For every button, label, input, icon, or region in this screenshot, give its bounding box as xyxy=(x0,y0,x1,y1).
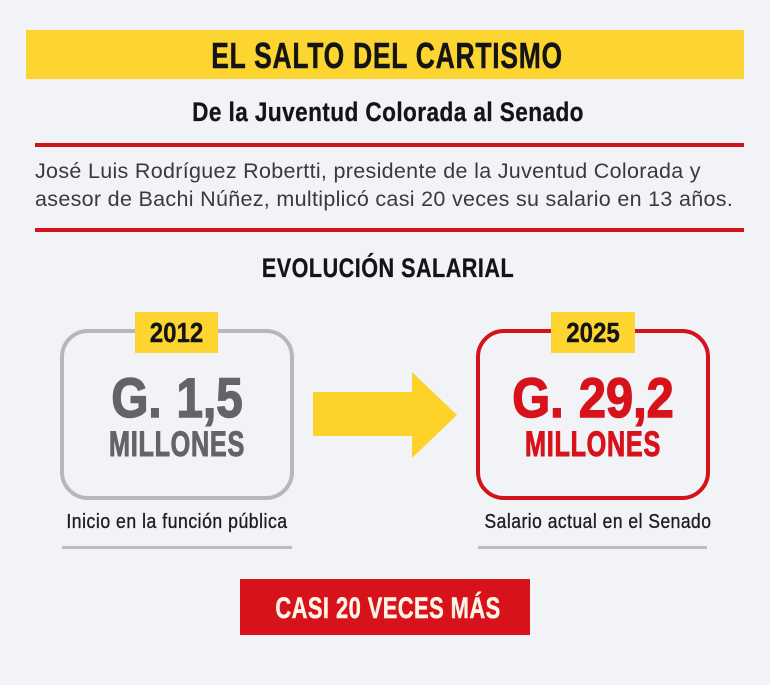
section heading: EVOLUCIÓN SALARIAL xyxy=(262,253,514,283)
top red rule xyxy=(35,143,744,147)
description text xyxy=(35,159,733,210)
year badge 2025 xyxy=(551,312,635,353)
description text: asesor de Bachi Núñez, multiplicó casi 20 veces su salario en 13 años. xyxy=(35,186,733,210)
year badge 2012 xyxy=(135,312,218,353)
panel: 2012 salary xyxy=(60,329,294,500)
caption 2012: Inicio en la función pública xyxy=(66,511,288,533)
amount 2012: G. 1,5 xyxy=(111,366,243,429)
caption 2025: Salario actual en el Senado xyxy=(485,511,711,533)
title banner xyxy=(26,30,744,79)
caption rule 2025 xyxy=(478,546,707,549)
conclusion text: CASI 20 VECES MÁS xyxy=(275,592,500,625)
panel: 2025 salary xyxy=(476,329,710,500)
conclusion banner xyxy=(240,579,530,635)
year 2012: 2012 xyxy=(150,317,203,348)
amount 2025: G. 29,2 xyxy=(512,366,674,429)
caption rule 2012 xyxy=(62,546,292,549)
year 2025: 2025 xyxy=(566,317,620,348)
title: EL SALTO DEL CARTISMO xyxy=(211,34,563,76)
description text: José Luis Rodríguez Robertti, presidente de la Juventud Colorada y xyxy=(35,159,701,183)
unit 2012: MILLONES xyxy=(109,425,245,464)
subtitle: De la Juventud Colorada al Senado xyxy=(192,97,584,127)
arrow xyxy=(313,372,457,458)
bottom red rule xyxy=(35,228,744,232)
unit 2025: MILLONES xyxy=(525,425,661,464)
